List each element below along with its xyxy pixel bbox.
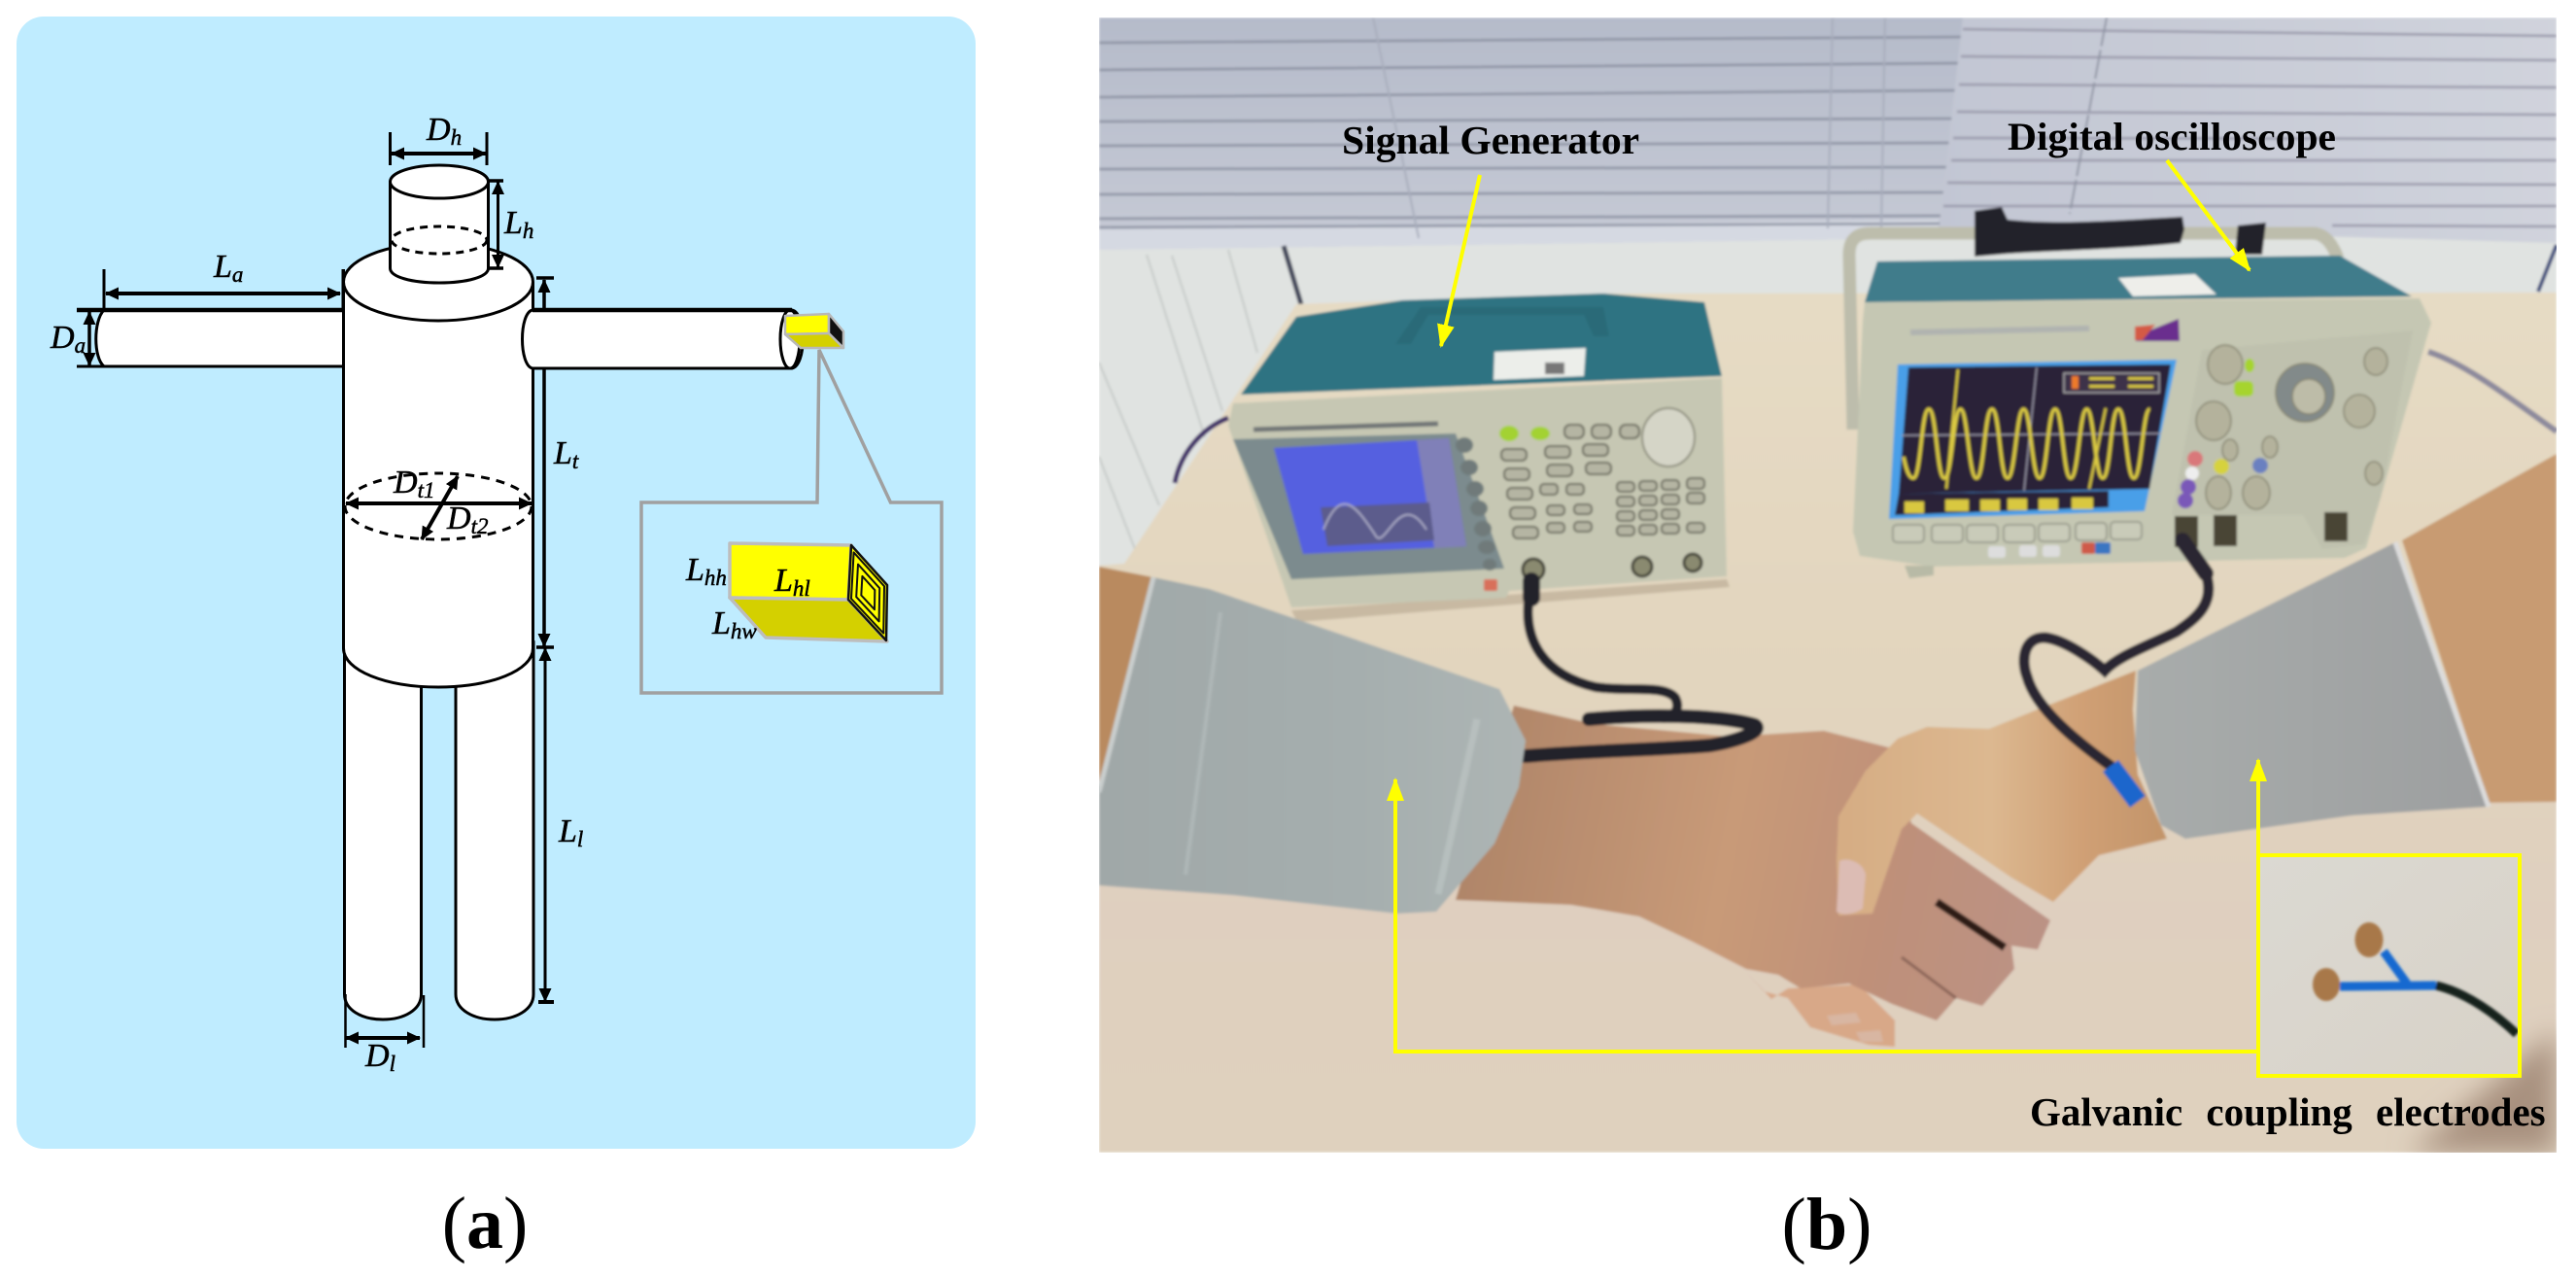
wall panel seams: [1099, 250, 1257, 554]
dimension labels: D: [447, 501, 471, 536]
shoulder ellipse: [344, 243, 532, 321]
head top ellipse: [391, 165, 488, 198]
oscilloscope screen frame: [1889, 360, 2177, 519]
left hand and wrist: [1456, 706, 2050, 1020]
dimension labels: hw: [731, 619, 757, 643]
dimension labels: h: [523, 219, 533, 243]
right hand and wrist: [1837, 671, 2167, 915]
oscilloscope vertical traces: [1946, 369, 2106, 489]
oscilloscope screen: [1895, 364, 2171, 515]
arm diameter dimension: [77, 312, 105, 366]
oscilloscope lid: [1865, 256, 2412, 302]
oscilloscope control panel: [2172, 330, 2413, 549]
dimension labels: L: [504, 205, 523, 241]
generator softkeys: [1456, 437, 1496, 570]
dimension labels: L: [712, 605, 731, 641]
oscilloscope screen bottom readouts: [1905, 498, 2093, 513]
dimension labels: t2: [471, 514, 488, 538]
cable: oscilloscope to right wrist: [2024, 540, 2209, 766]
finger gap: [1937, 902, 2005, 948]
electrode black cable: [2436, 985, 2517, 1034]
label: digital oscilloscope: Digital oscilloscope: [2008, 115, 2336, 158]
electrode blue wires: [2340, 951, 2436, 986]
yellow arrow: digital oscilloscope: [2167, 160, 2250, 270]
zoom callout lines and box: [641, 350, 942, 693]
desk surface: [1099, 293, 2557, 1153]
right arm end ellipse: [780, 310, 800, 368]
signal generator: [1228, 294, 1730, 622]
arm length dimension: [104, 269, 343, 310]
electrode discs: [2355, 922, 2383, 957]
generator green buttons: [1499, 426, 1550, 441]
oscilloscope knobs: [2196, 345, 2387, 509]
inset: galvanic coupling electrodes photo: [2258, 855, 2520, 1076]
finger crease: [1902, 957, 1956, 998]
icon: small antenna block on hand: [785, 314, 843, 348]
generator keypad: [1501, 425, 1704, 538]
dimension labels: hl: [793, 576, 810, 601]
dimension labels: t1: [418, 478, 434, 502]
diagram: cylindrical human body model: [77, 165, 803, 1019]
torso: [344, 282, 532, 687]
dashed neck ellipse: [392, 226, 487, 254]
oscilloscope readout box: [2064, 373, 2159, 393]
generator waveform panel: [1321, 502, 1434, 546]
oscilloscope brand patch: [2136, 319, 2180, 341]
right arm: [523, 310, 803, 368]
dimension labels: [50, 112, 810, 1076]
right leg: [456, 641, 533, 1019]
dimension labels: D: [394, 465, 418, 501]
dimension labels: D: [427, 112, 451, 148]
label: signal generator: Signal Generator: [1342, 118, 1639, 162]
torso length dimension: [536, 278, 554, 647]
left leg: [344, 641, 422, 1019]
window blinds right: [1939, 17, 2557, 243]
dimension labels: hh: [704, 566, 727, 590]
generator screen: [1273, 438, 1436, 556]
dimension labels: t: [572, 449, 579, 473]
dimension labels: l: [390, 1052, 395, 1076]
oscilloscope feet: [1905, 566, 1934, 578]
yellow arrow: electrode box to left sleeve: [1395, 779, 2258, 1052]
oscilloscope softkeys: [1893, 522, 2142, 542]
arm top edges: [77, 308, 792, 312]
caption (a): (a): [442, 1183, 528, 1264]
generator knob: [1642, 408, 1695, 466]
oscilloscope cable behind: [2428, 352, 2557, 432]
oscilloscope green buttons: [2234, 359, 2254, 397]
yellow arrow: signal generator: [1441, 175, 1480, 346]
label: galvanic coupling electrodes: Galvanic coupling electrodes: [2030, 1089, 2546, 1134]
window blinds left: [1099, 17, 1963, 250]
wall shading strip: [1284, 246, 1301, 304]
oscilloscope screen grid: [1902, 367, 2161, 491]
head cylinder: [391, 182, 488, 283]
dimension labels: L: [559, 813, 577, 849]
yellow arrow: electrode box to right sleeve: [2256, 760, 2260, 855]
generator lid: [1241, 294, 1722, 395]
generator connectors: [1523, 554, 1701, 580]
generator label sticker: [1494, 348, 1586, 380]
yellow inset frame: [2258, 855, 2520, 1076]
oscilloscope sine waveform: [1904, 409, 2149, 478]
oscilloscope front connectors: [2175, 512, 2348, 547]
generator screen bezel: [1233, 433, 1504, 579]
digital oscilloscope: [1849, 207, 2431, 578]
dimension labels: h: [451, 125, 462, 150]
dimension labels: l: [577, 827, 583, 851]
head length dimension: [489, 181, 503, 268]
oscilloscope channel buttons: [2178, 451, 2268, 508]
oscilloscope body: [1853, 298, 2431, 567]
dimension labels: D: [51, 320, 75, 356]
generator red power button: [1484, 579, 1497, 591]
panel b: measurement setup photograph: [1099, 17, 2557, 1153]
dimension labels: L: [554, 435, 572, 471]
torso horizontal diameter arrow: [346, 501, 532, 505]
dimension labels: L: [686, 552, 704, 588]
generator brand strip: [1254, 424, 1438, 430]
torso outlines: [344, 269, 532, 687]
generator cable behind: [1175, 418, 1228, 483]
finger nails: [1827, 1013, 1883, 1042]
dimension labels: a: [75, 333, 86, 358]
leg length dimension: [538, 648, 554, 1002]
left arm: [96, 310, 344, 366]
photo wall background: [1099, 235, 2557, 566]
left sleeve: [1099, 577, 1526, 914]
generator shadow: [1291, 579, 1730, 622]
oscilloscope bottom buttons: [1988, 542, 2111, 558]
dimension lines and arrows: [77, 132, 554, 1048]
oscilloscope black handle: [1975, 207, 2184, 257]
generator body: [1228, 378, 1727, 607]
left forearm skin: [1099, 567, 1153, 792]
blue electrode connector on wrist: [2111, 766, 2138, 802]
panel a: cylindrical body model background: [17, 17, 976, 1149]
thumb nail: [1837, 860, 1866, 915]
dimension labels: D: [365, 1038, 390, 1074]
right hand lower fingers: [1746, 972, 1895, 1047]
dimension labels: L: [214, 249, 232, 285]
icon: enlarged antenna block: [730, 543, 887, 641]
dimension labels: L: [774, 563, 793, 599]
desk lower-right shading: [2410, 1030, 2557, 1153]
oscilloscope carry frame: [1849, 233, 2338, 430]
right sleeve: [2135, 542, 2489, 839]
leg diameter dimension: [346, 994, 424, 1048]
head diameter dimension: [391, 132, 487, 165]
oscilloscope label sticker: [2118, 274, 2216, 296]
right upper arm skin: [2402, 454, 2557, 803]
dimension labels: a: [232, 262, 243, 287]
caption (b): (b): [1782, 1184, 1872, 1265]
torso diagonal diameter arrow: [422, 476, 458, 539]
dashed torso cross-section: [345, 473, 532, 539]
cable: signal generator to left wrist: [1526, 581, 1757, 756]
